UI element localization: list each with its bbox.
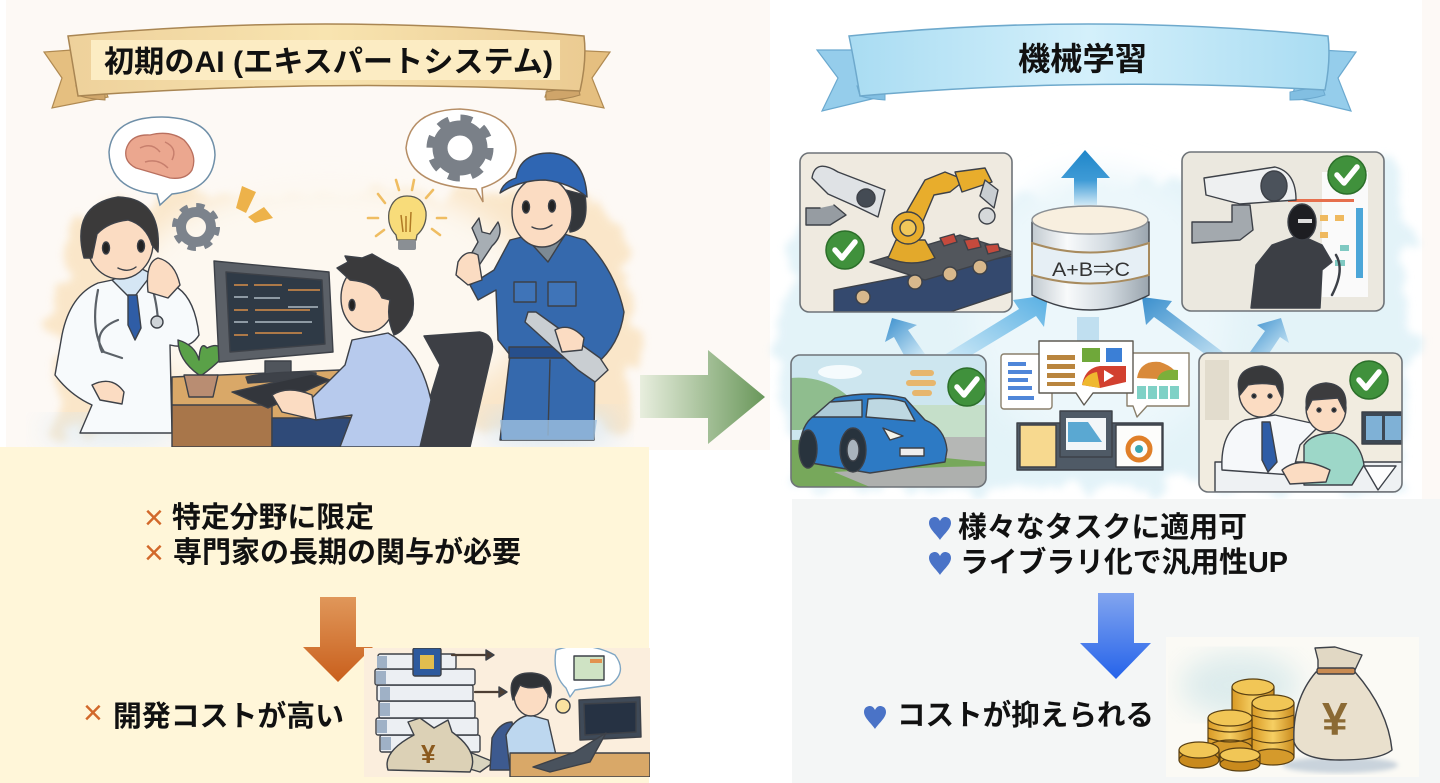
illustration: coins and yen bag: ¥: [1322, 693, 1348, 745]
card: self-driving car: [791, 355, 986, 487]
figure: doctor: [55, 197, 199, 433]
icon: brain speech bubble: [109, 117, 215, 205]
banner: early AI heading: [44, 24, 610, 108]
banner: machine learning heading: [817, 24, 1356, 111]
card: factory robot: [800, 153, 1016, 312]
icon group: varied task data: [1001, 341, 1189, 470]
illustration: coins and yen bag: [1166, 637, 1419, 777]
arrows: between cards and data store: [885, 150, 1289, 365]
illustration: servers, cost and developer: ¥: [421, 739, 436, 769]
text: first drawbacks: [144, 499, 521, 572]
monitor: [214, 261, 333, 383]
illustration: servers, cost and developer: [364, 646, 650, 777]
wrench small: [458, 218, 500, 282]
text: benefits: 様々なタスクに適用可: [958, 511, 1247, 544]
watercolor wash right: [780, 160, 1412, 488]
text: first drawbacks: 特定分野に限定: [172, 501, 374, 534]
text: benefits: [929, 511, 1288, 579]
text: first drawbacks: ×: [144, 499, 164, 537]
panel: machine learning illustration: [780, 24, 1412, 492]
icon: gear speech bubble: [406, 109, 516, 202]
panel: early AI illustration: [40, 24, 640, 448]
text: first drawbacks: 専門家の長期の関与が必要: [173, 535, 521, 569]
icon: gold accent marks: [236, 186, 273, 223]
text: high development cost: ×: [83, 694, 103, 732]
heading text: 機械学習: [1018, 41, 1147, 77]
text: high development cost: 開発コストが高い: [113, 699, 344, 733]
arrow: transition to machine learning: [640, 350, 765, 444]
heading text: 初期のAI (エキスパートシステム): [104, 46, 553, 79]
coin stacks: [1179, 679, 1294, 771]
arrow: leads to high cost: [303, 597, 373, 682]
card: security camera and intruder: [1182, 152, 1384, 311]
panel: early AI drawbacks: [0, 447, 650, 783]
text: benefits: ライブラリ化で汎用性UP: [960, 545, 1288, 579]
rule text: A+B⇒C: [1052, 260, 1130, 281]
card: doctor and patient: [1199, 353, 1407, 492]
wrench large: [525, 312, 608, 382]
text: reduced cost: コストが抑えられる: [897, 698, 1154, 732]
arrow: leads to lower cost: [1080, 593, 1151, 679]
yen money bag: [1294, 647, 1392, 760]
panel: machine learning benefits: [792, 499, 1440, 783]
figure: programmer: [272, 254, 492, 447]
data cards and laptop: [1017, 411, 1163, 470]
data bubble: text list: [1001, 354, 1052, 409]
icon: light bulb: [368, 180, 446, 250]
plant: [178, 340, 222, 397]
figure: engineer: [456, 153, 624, 440]
figure: desk with plant and computer: [172, 261, 375, 447]
text: first drawbacks: ×: [144, 534, 164, 572]
keyboard: [232, 374, 330, 408]
icon: database cylinder with rule: [1032, 206, 1149, 310]
watercolor wash left: [40, 180, 640, 448]
icon: small gear: [175, 206, 217, 248]
data bubble: chart and media: [1127, 353, 1189, 417]
